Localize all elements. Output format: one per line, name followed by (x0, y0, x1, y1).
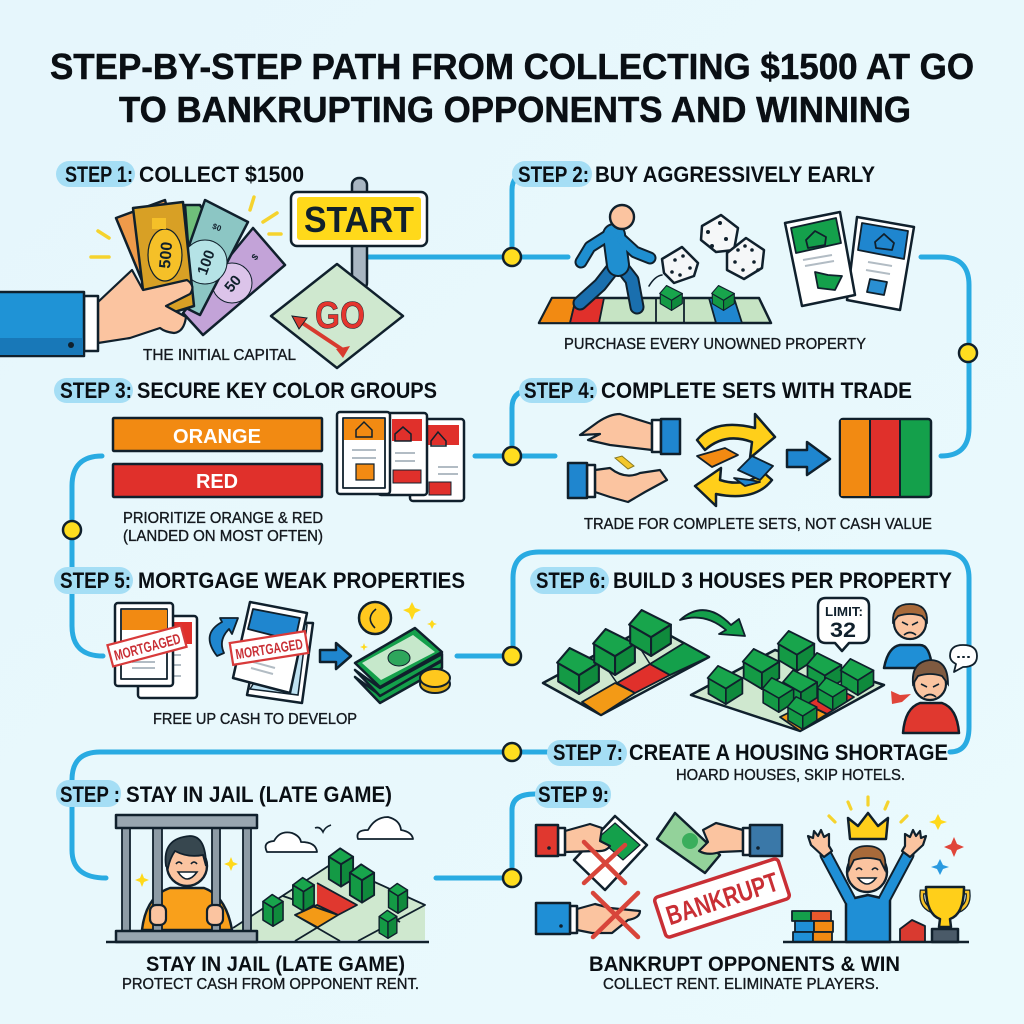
icon: orange and red property cards (337, 412, 464, 501)
icon: hand holding money: $ (250, 252, 260, 262)
step 1 heading: STEP 1: (65, 162, 133, 187)
caption: step 1: THE INITIAL CAPITAL (143, 347, 296, 364)
caption: step 3 (123, 510, 323, 545)
step 8 heading: STEP : (60, 782, 120, 807)
step 2 heading: BUY AGGRESSIVELY EARLY (595, 162, 875, 187)
caption: step 8: STAY IN JAIL (LATE GAME) (146, 953, 405, 976)
callout: limit 32 (818, 598, 869, 651)
icon: landscape with houses (233, 848, 425, 941)
title: STEP-BY-STEP PATH FROM COLLECTING $1500 AT GO (50, 46, 974, 87)
icon: hand holding money (0, 197, 285, 356)
step 5 heading: MORTGAGE WEAK PROPERTIES (138, 568, 465, 593)
step 8 heading: STAY IN JAIL (LATE GAME) (126, 782, 392, 807)
icon: cash and coins (355, 602, 450, 703)
icon: hand holding money: $0 (211, 222, 223, 233)
icon: crossed open hand (536, 893, 640, 937)
orange bar: ORANGE (173, 426, 261, 448)
caption: step 5: FREE UP CASH TO DEVELOP (153, 711, 357, 728)
icon: mortgaged cards two: MORTGAGED (234, 637, 304, 663)
icon: trading hands (568, 414, 680, 502)
caption: step 8: PROTECT CASH FROM OPPONENT RENT. (122, 976, 419, 993)
red bar (113, 464, 322, 497)
caption: step 9: COLLECT RENT. ELIMINATE PLAYERS. (603, 976, 879, 993)
caption: step 7: HOARD HOUSES, SKIP HOTELS. (676, 767, 905, 784)
caption: step 8 (122, 953, 419, 993)
step 7 heading: CREATE A HOUSING SHORTAGE (629, 740, 948, 765)
stamp: bankrupt: BANKRUPT (663, 867, 782, 931)
step 2 heading: STEP 2: (518, 162, 589, 187)
step 3 heading: SECURE KEY COLOR GROUPS (137, 378, 437, 403)
icon: walking player (580, 205, 662, 307)
caption: step 3: PRIORITIZE ORANGE & RED (123, 510, 323, 527)
arrow: green curved (680, 610, 745, 636)
icon: go square: GO (315, 295, 365, 337)
step 7 heading: STEP 7: (553, 740, 623, 765)
step 5 heading: STEP 5: (60, 568, 131, 593)
icon: property cards (785, 212, 914, 310)
connector path between steps (72, 174, 969, 878)
icon: player in jail (106, 815, 429, 942)
icon: hand holding money: 100 (194, 248, 219, 277)
step 1 heading: COLLECT $1500 (139, 162, 304, 187)
icon: crowded houses on board (691, 631, 884, 731)
icon: mortgaged cards one (107, 603, 197, 698)
icon: start sign (291, 178, 427, 290)
icon: hand passing crossed card (536, 816, 647, 890)
arrow (320, 643, 351, 669)
caption: step 9: BANKRUPT OPPONENTS & WIN (589, 953, 900, 976)
step 6 heading: BUILD 3 HOUSES PER PROPERTY (613, 568, 952, 593)
icon: winner with crown (808, 797, 964, 942)
icon: go square (271, 264, 403, 368)
caption: step 2: PURCHASE EVERY UNOWNED PROPERTY (564, 336, 866, 353)
icon: mortgaged cards one: MORTGAGED (113, 631, 182, 664)
connector node dots (63, 248, 977, 887)
icon: dice (662, 215, 764, 283)
red bar: RED (196, 471, 238, 493)
arrow (787, 442, 830, 475)
icon: hand holding money: 500 (157, 241, 176, 269)
callout: limit 32: LIMIT: (825, 605, 863, 619)
caption: step 4: TRADE FOR COMPLETE SETS, NOT CASH VALUE (584, 516, 932, 533)
completed colour set (840, 419, 931, 497)
step 8 heading (56, 780, 392, 807)
icon: clouds and bird (266, 817, 413, 852)
step 9 heading: STEP 9: (538, 782, 609, 807)
icon: bricks and red house (783, 911, 969, 942)
icon: hand holding money: 50 (221, 272, 245, 296)
icon: three houses on board (543, 610, 709, 715)
title: TO BANKRUPTING OPPONENTS AND WINNING (119, 89, 911, 130)
title (50, 46, 974, 130)
icon: hand passing cash (657, 813, 782, 873)
caption: step 3: (LANDED ON MOST OFTEN) (123, 528, 323, 545)
icon: angry opponents (884, 604, 977, 733)
step 6 heading: STEP 6: (536, 568, 606, 593)
icon: start sign: START (304, 199, 414, 240)
icon: trophy (922, 887, 968, 942)
icon: board strip (539, 286, 771, 323)
step 4 heading: COMPLETE SETS WITH TRADE (601, 378, 912, 403)
icon: exchange arrows (695, 414, 775, 506)
step 4 heading: STEP 4: (524, 378, 595, 403)
icon: curved arrow (210, 618, 238, 656)
caption: step 9 (589, 953, 900, 993)
step 3 heading: STEP 3: (60, 378, 132, 403)
step 1 heading (56, 161, 304, 187)
icon: mortgaged cards two (230, 602, 313, 703)
step 5 heading (54, 567, 465, 594)
orange bar (113, 418, 322, 451)
callout: limit 32: 32 (830, 619, 856, 642)
